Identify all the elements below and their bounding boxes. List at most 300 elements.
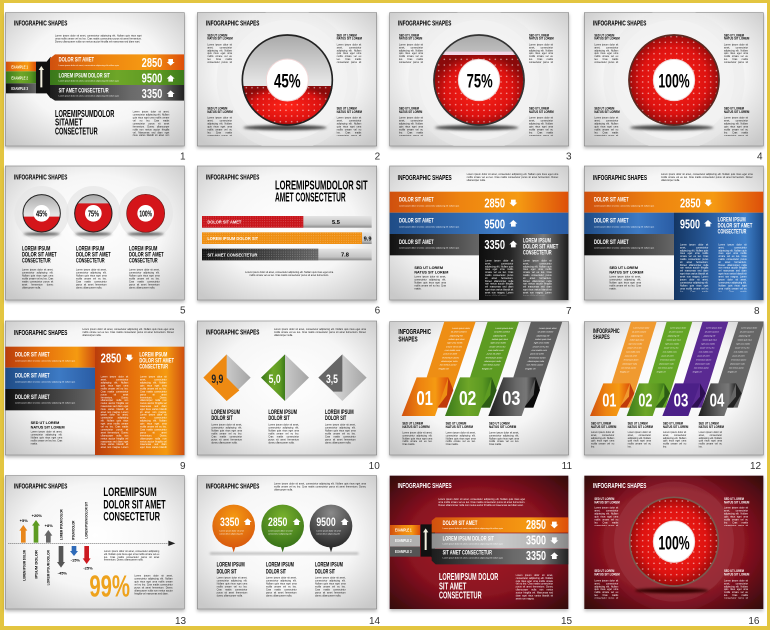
text: top left: NATUS SIT LOREM [594, 500, 620, 504]
slide 4: 100% gauge [584, 9, 763, 162]
band: orange [5, 347, 95, 368]
title: INFOGRAPHIC SHAPES [398, 173, 452, 182]
ribbon 02: ornare vel eu leo [489, 345, 507, 348]
ribbon 02: cras mattis cons [488, 349, 505, 352]
column 3 [315, 563, 346, 597]
bar: dark: 3350 [526, 549, 546, 563]
pin: green: Lorem ipsum dolor sit amet [268, 529, 293, 532]
ribbon 03: nullam quis risus [535, 338, 553, 341]
pin: green [261, 505, 304, 552]
diamond 9.9 [203, 354, 251, 401]
ribbon 01: ornare vel eu leo [445, 345, 463, 348]
slide 11: three ribbons [390, 322, 572, 472]
pin: orange: consectetur adipiscing elit [219, 532, 243, 535]
example tabs: EXAMPLE 2 [11, 75, 28, 80]
ribbon 01: non metus auctor [439, 364, 457, 367]
column 2 [628, 421, 653, 448]
band: dark [390, 234, 479, 255]
ribbon 02: nullam quis risus [491, 338, 509, 341]
band: orange: 2850 [680, 196, 701, 210]
diamond 3.5 [318, 354, 367, 401]
column 1: Lorem ipsum dolor sit amet, consectetur adipiscing elit. Nullam quis risus eget urna mollis ornare vel eu leo. Cras mattis consectetur purus sit amet fermentum donec ullamcorper nulla. [211, 424, 242, 444]
ribbon 02: sit amet consect [668, 330, 684, 333]
page number: 14 [369, 616, 381, 627]
arrow: red down: -25% [83, 565, 93, 570]
ribbon 03: nullam quis risus [702, 339, 717, 341]
text: top right: SED UT LOREM [529, 33, 549, 37]
column 3: Lorem ipsum dolor sit amet, consectetur adipiscing elit. Nullam quis risus eget urna mollis ornare vel eu leo. Cras mattis consectetur purus sit amet fermentum donec ullamcorper nulla. [129, 269, 160, 289]
ribbon 04: 04 [710, 390, 725, 411]
ribbon 02: adipiscing elit [492, 334, 507, 337]
text: bottom left: SED UT LOREM [207, 107, 228, 111]
ribbon 03: fringilla vel [692, 371, 702, 373]
title: INFOGRAPHIC [398, 329, 431, 336]
column 2: SED UT LOREM [628, 421, 648, 425]
title: INFOGRAPHIC SHAPES [14, 18, 67, 27]
column 3: NATUS SIT LOREM [489, 425, 517, 429]
bar: orange 9.9: 9.9 [364, 236, 372, 242]
ribbon 04: ornare vel eu leo [735, 347, 750, 349]
ribbon 03: ornare vel eu leo [532, 345, 550, 348]
page number: 5 [180, 305, 186, 316]
gauge 75%: 75% [88, 209, 99, 218]
band: dark: Lorem ipsum dolor sit amet, consectetur adipiscing elit nullam quis [399, 247, 459, 250]
vertical labels: LOREM IPSUM DOLOR [58, 509, 63, 540]
bar: dark: Lorem ipsum dolor sit amet, consectetur adipiscing elit nullam quis [443, 556, 503, 559]
column 2: LOREM IPSUM [266, 563, 294, 569]
column 1: Lorem ipsum dolor sit amet, consectetur adipiscing elit. Nullam quis risus eget urna mollis ornare vel eu leo. [591, 431, 614, 448]
shadow line [210, 553, 358, 554]
ribbon 03: adipiscing elit [536, 334, 550, 337]
page number: 10 [369, 461, 380, 472]
text: top right [337, 33, 362, 64]
band: blue: Lorem ipsum dolor sit amet, consectetur adipiscing elit nullam quis [15, 380, 75, 383]
band: dark: Lorem ipsum dolor sit amet, consectetur adipiscing elit nullam quis [15, 402, 75, 405]
band: orange: DOLOR SIT AMET [15, 352, 50, 359]
slide 16: dark red gauge [584, 471, 763, 627]
vertical labels: LOREM IPSUM DOLOR SIT [83, 502, 88, 539]
ribbon 04: non metus auctor [728, 366, 744, 369]
column 4: SED UT LOREM [699, 421, 719, 425]
title: SHAPES [593, 335, 610, 341]
ribbon 03: ullamcorper nulla [527, 360, 545, 363]
ribbon 02: non metus auctor [483, 364, 501, 367]
page number: 16 [748, 616, 760, 627]
ribbon 02: Lorem ipsum dolor [495, 327, 514, 330]
text: top left [594, 497, 620, 526]
pin: green: consectetur adipiscing elit [268, 532, 292, 535]
band: blue: DOLOR SIT AMET [594, 218, 629, 225]
ribbon 01: sit amet consect [450, 331, 467, 334]
ribbon 03: ullamcorper nulla [695, 363, 711, 365]
ribbon 01: fringilla vel [438, 367, 450, 370]
slide 6: horizontal bars [197, 166, 381, 316]
column 1: DOLOR SIT [211, 415, 233, 422]
heading: AMET CONSECTETUR [275, 191, 346, 205]
ribbon 03: sit amet consect [704, 330, 720, 333]
gauge 100% [118, 186, 173, 241]
column 1 [217, 563, 247, 597]
bar: dark: Lorem ipsum dolor sit amet, consectetur adipiscing elit nullam quis [59, 94, 119, 97]
gauge 100%: 100% [658, 533, 690, 554]
arrow: blue down [70, 546, 80, 562]
column 1 [22, 246, 57, 289]
ribbon 01: fringilla vel [620, 371, 630, 373]
column 2: LOREM IPSUM [268, 409, 297, 416]
text: bottom left [594, 107, 620, 136]
bar: orange: Lorem ipsum dolor sit amet, consectetur adipiscing elit nullam quis [59, 64, 119, 67]
column 2 [266, 563, 297, 597]
text: bottom left: NATUS SIT LOREM [207, 110, 233, 114]
text: top right: NATUS SIT LOREM [529, 37, 554, 41]
title: SHAPES [398, 337, 418, 344]
band: blue: Lorem ipsum dolor sit amet, consectetur adipiscing elit nullam quis [594, 225, 654, 228]
heading [55, 109, 114, 137]
column 2: Lorem ipsum dolor sit amet, consectetur adipiscing elit. Nullam quis risus eget urna mollis ornare vel eu leo. Cras mattis consectetur purus sit amet fermentum donec ullamcorper nulla. [266, 577, 297, 597]
text: bottom right: NATUS SIT LOREM [724, 110, 750, 114]
bar: orange: DOLOR SIT AMET [443, 520, 477, 527]
bar: red 5.5 [202, 216, 372, 228]
ribbon 01: eget urna mollis [628, 342, 643, 345]
icon: black arrow box [36, 57, 51, 98]
text: top left: NATUS SIT LOREM [399, 37, 423, 41]
band: dark: DOLOR SIT AMET [15, 394, 50, 401]
column 3: LOREM IPSUM [315, 563, 343, 569]
text: bottom left [207, 107, 233, 136]
ribbon 04 [698, 322, 763, 416]
text: top right [529, 33, 554, 64]
ribbon 03: purus sit amet [697, 354, 710, 357]
heading: CONSECTETUR [55, 126, 98, 137]
panel: dark detail: CONSECTETUR [523, 250, 552, 256]
ribbon 01 [590, 322, 657, 416]
column 1: CONSECTETUR [22, 258, 51, 265]
pin: dark: consectetur adipiscing elit [316, 532, 340, 535]
page number: 9 [180, 461, 186, 472]
text: bottom right: SED UT LOREM [724, 569, 744, 573]
text: bottom right: SED UT LOREM [724, 107, 744, 111]
ribbon 04: ullamcorper nulla [730, 363, 746, 365]
ribbon 01: purus sit amet [443, 353, 458, 356]
page number: 6 [375, 305, 381, 316]
arrow: orange up: +5% [20, 518, 28, 523]
gauge 75% [66, 186, 121, 241]
title: INFOGRAPHIC SHAPES [398, 18, 451, 27]
panel: blue detail [674, 213, 763, 300]
panel: dark detail: 3350 [484, 238, 505, 252]
page number: 15 [561, 616, 573, 627]
ribbon 02: fringilla vel [656, 371, 666, 373]
text: top right: SED UT LOREM [724, 497, 744, 501]
pin: dark: 9500 [316, 515, 336, 529]
pin: dark [310, 505, 352, 552]
panel: orange detail [95, 347, 184, 455]
bar: silver: LOREM IPSUM DOLOR SIT [443, 536, 494, 543]
band: blue: DOLOR SIT AMET [15, 373, 50, 380]
pin: green: 2850 [268, 515, 288, 529]
ribbon 04: adipiscing elit [738, 334, 751, 337]
column 1 [211, 409, 242, 444]
panel: orange detail: LOREM IPSUM [139, 353, 167, 359]
page number: 4 [757, 151, 763, 162]
heading: DOLOR SIT AMET [103, 497, 166, 511]
ribbon 01: fermentum donec [442, 356, 460, 359]
heading: LOREMIPSUM [103, 485, 157, 499]
bar: silver: 3500 [526, 534, 546, 548]
band: dark: DOLOR SIT AMET [594, 239, 629, 246]
text: top left: SED UT LOREM [594, 497, 615, 501]
column 3: LOREM IPSUM [325, 409, 354, 416]
slide 13: arrows chart [5, 476, 187, 627]
text: bottom right: NATUS SIT LOREM [337, 110, 362, 114]
text block: SED UT LOREM [31, 420, 60, 425]
title: INFOGRAPHIC SHAPES [206, 18, 259, 27]
vertical labels: IPSUM DOLOR [71, 521, 76, 540]
diamond 9.9: 9,9 [211, 372, 224, 386]
ribbon 03: cras mattis cons [531, 349, 548, 352]
ribbon 04: Lorem ipsum dolor [741, 327, 757, 329]
band: orange [584, 192, 763, 213]
ribbon 02 [445, 322, 519, 416]
title [593, 329, 620, 341]
ribbon 02: purus sit amet [661, 354, 674, 357]
ribbon 01: Lorem ipsum dolor [452, 327, 471, 330]
column 3: DOLOR SIT AMET [129, 252, 164, 259]
text: bottom left [399, 107, 423, 136]
arrow: grey up [44, 523, 53, 543]
axis arrow [8, 541, 175, 546]
text: top right: NATUS SIT LOREM [724, 500, 750, 504]
ribbon 02: non metus auctor [657, 366, 673, 369]
ribbon 01: cras mattis cons [626, 350, 640, 353]
column 1: LOREM IPSUM [211, 409, 240, 416]
bar: dark [432, 549, 568, 564]
panel: blue detail: DOLOR SIT AMET [718, 224, 753, 230]
slide 1: banner bars [5, 13, 186, 162]
panel: dark detail: DOLOR SIT AMET [523, 244, 559, 250]
panel: dark detail: LOREM IPSUM [523, 238, 551, 244]
column 2 [268, 409, 299, 444]
text: bottom right: SED UT LOREM [337, 107, 357, 111]
panel: dark detail [479, 234, 568, 300]
ribbon 01: cras mattis cons [444, 349, 462, 352]
bar: red 5.5: DOLOR SIT AMET [207, 220, 241, 226]
bar: dark [50, 85, 184, 101]
column 2: NATUS SIT LOREM [446, 425, 473, 429]
band: orange: Lorem ipsum dolor sit amet, consectetur adipiscing elit nullam quis [399, 204, 459, 207]
gauge 75%: 75% [467, 71, 493, 92]
ribbon 02: fermentum donec [485, 356, 504, 359]
gauge 100% [628, 34, 720, 130]
arrow: green up: +20% [32, 513, 42, 518]
arrow: grey up: +8% [45, 523, 53, 528]
column 3: Lorem ipsum dolor sit amet, consectetur adipiscing elit. Nullam quis risus eget urna mollis ornare vel eu leo. [663, 431, 686, 448]
page number: 7 [566, 306, 572, 317]
text: bottom right: NATUS SIT LOREM [529, 110, 554, 114]
title: INFOGRAPHIC SHAPES [593, 18, 646, 27]
bar: orange: Lorem ipsum dolor sit amet, consectetur adipiscing elit nullam quis [443, 527, 503, 530]
column 4: NATUS SIT LOREM [699, 425, 724, 429]
panel: blue detail: CONSECTETUR [718, 230, 747, 236]
bar: green [50, 70, 184, 86]
text: bottom right: NATUS SIT LOREM [724, 573, 750, 577]
text: bottom right [724, 569, 750, 599]
column 3: SED UT LOREM [489, 421, 510, 425]
text: bottom left: NATUS SIT LOREM [399, 110, 423, 114]
title [398, 329, 431, 344]
ribbon 03: fermentum donec [528, 356, 547, 359]
page number: 2 [375, 151, 381, 162]
ribbon 03: sit amet consect [537, 331, 554, 334]
page number: 13 [175, 616, 187, 627]
column 2: NATUS SIT LOREM [628, 425, 653, 429]
ribbon 03: 03 [674, 390, 688, 411]
ribbon 01: ullamcorper nulla [441, 360, 459, 363]
slide 2: 45% gauge [197, 9, 381, 162]
bar: orange 9.9 [202, 232, 372, 244]
ribbon 03: eget urna mollis [533, 342, 550, 345]
column 3: NATUS SIT LOREM [663, 425, 689, 429]
bar: silver: Lorem ipsum dolor sit amet, consectetur adipiscing elit nullam quis [443, 543, 503, 546]
column 2: Lorem ipsum dolor sit amet, consectetur adipiscing elit. Nullam quis risus eget urna mollis ornare vel eu leo. Cras mattis. [446, 431, 476, 446]
column 2: Lorem ipsum dolor sit amet, consectetur adipiscing elit. Nullam quis risus eget urna mollis ornare vel eu leo. Cras mattis consectetur purus sit amet fermentum donec ullamcorper nulla. [268, 424, 299, 444]
text: bottom left: SED UT LOREM [399, 107, 419, 111]
slide 15: dark red banner [390, 476, 573, 627]
panel: orange detail: 2850 [101, 351, 121, 365]
gauge 100%: 100% [139, 209, 152, 218]
title: INFOGRAPHIC SHAPES [398, 481, 452, 490]
text block: NATUS SIT LOREM [31, 425, 65, 430]
diamond 5.0 [261, 354, 309, 401]
arrow: blue down: -15% [71, 557, 80, 562]
diamond 5.0: 5,0 [269, 372, 281, 386]
heading: SITAMET [55, 118, 82, 129]
column 1: LOREM IPSUM [22, 246, 50, 253]
ribbon 04: eget urna mollis [736, 342, 750, 345]
bar: dark: 3350 [142, 87, 162, 101]
example tabs: EXAMPLE 1 [395, 528, 412, 533]
title: INFOGRAPHIC [593, 329, 620, 335]
ribbon 03: fermentum donec [696, 358, 712, 361]
title: INFOGRAPHIC SHAPES [14, 328, 67, 337]
gauge 45% [14, 186, 69, 241]
bar: green: 9500 [142, 72, 162, 86]
column 3: Lorem ipsum dolor sit amet, consectetur adipiscing elit. Nullam quis risus eget urna mollis ornare vel eu leo. Cras mattis consectetur purus sit amet fermentum donec ullamcorper nulla. [325, 424, 356, 444]
title: INFOGRAPHIC SHAPES [14, 481, 67, 490]
example tabs: EXAMPLE 3 [11, 86, 28, 91]
ribbon 03 [662, 322, 728, 416]
column 1: Lorem ipsum dolor sit amet, consectetur adipiscing elit. Nullam quis risus eget urna mollis ornare vel eu leo. Cras mattis. [402, 431, 432, 446]
band: orange: 2850 [484, 196, 505, 210]
example tabs: EXAMPLE 2 [395, 538, 412, 543]
band: dark [5, 389, 95, 410]
column 3 [663, 421, 689, 448]
bar: dark: SIT AMET CONSECTETUR [59, 87, 109, 94]
ribbon 01 [402, 322, 476, 416]
ribbon 03: non metus auctor [693, 366, 709, 369]
ribbon 03: adipiscing elit [703, 334, 716, 337]
title: INFOGRAPHIC SHAPES [206, 481, 259, 490]
ribbon 02: ullamcorper nulla [484, 360, 502, 363]
ribbon 03: cras mattis cons [698, 350, 713, 353]
column 2: LOREM IPSUM [76, 246, 104, 253]
text: bottom left [594, 569, 620, 599]
ribbon 01: non metus auctor [621, 366, 637, 369]
ribbon 02: 02 [638, 390, 652, 411]
arrow: orange up [19, 518, 28, 543]
arrow: red down [83, 546, 93, 570]
title: INFOGRAPHIC SHAPES [593, 173, 647, 182]
pin: orange: 3350 [220, 515, 240, 529]
vertical labels: IPSUM DOLOR [33, 550, 38, 579]
column 2: SED UT LOREM [446, 421, 467, 425]
column 3: SED UT LOREM [663, 421, 683, 425]
band: blue [5, 368, 95, 389]
column 3: Lorem ipsum dolor sit amet, consectetur adipiscing elit. Nullam quis risus eget urna mollis ornare vel eu leo. Cras mattis consectetur purus sit amet fermentum donec ullamcorper nulla. [315, 577, 346, 597]
column 4 [699, 421, 724, 448]
ribbon 01: adipiscing elit [631, 334, 643, 337]
gauge 45%: 45% [36, 209, 47, 218]
band: blue [390, 213, 568, 234]
text: bottom left: SED UT LOREM [594, 107, 615, 111]
panel: orange detail: DOLOR SIT AMET [139, 359, 174, 365]
ribbon 02: Lorem ipsum dolor [670, 327, 686, 329]
arrow: dark down: -45% [58, 571, 67, 576]
slide 12: four ribbons [584, 322, 763, 472]
vertical labels: LOREM IPSUM DOLOR [21, 550, 26, 581]
text block: Lorem ipsum dolor sit amet, consectetur adipiscing elit. Nullam quis risus eget urna mollis ornare vel eu leo. Cras mattis consectetur purus sit amet fermentum. Donec ullamcorper nulla non metus auctor fringilla vel maecenas sed diam. [134, 575, 173, 595]
text: top left: NATUS SIT LOREM [207, 37, 233, 41]
text: top left: SED UT LOREM [207, 33, 228, 37]
ribbon 03: non metus auctor [526, 364, 544, 367]
heading: CONSECTETUR [103, 510, 160, 524]
band: orange [390, 192, 568, 213]
ribbon 01: adipiscing elit [449, 334, 463, 337]
text: bottom right [529, 107, 554, 136]
text: top right [724, 33, 750, 64]
ribbon 03: purus sit amet [530, 353, 545, 356]
text: bottom right: SED UT LOREM [529, 107, 549, 111]
bar: green: LOREM IPSUM DOLOR SIT [59, 72, 110, 79]
column 3 [325, 409, 356, 444]
ribbon 03: Lorem ipsum dolor [538, 327, 557, 330]
page number: 11 [562, 461, 572, 472]
column 2 [446, 421, 476, 447]
band: dark [584, 234, 674, 255]
ribbon 04: fringilla vel [727, 371, 737, 373]
bar: orange [432, 517, 568, 533]
title: INFOGRAPHIC SHAPES [593, 481, 646, 490]
big number: 99% [89, 570, 130, 604]
bar: orange 9.9: LOREM IPSUM DOLOR SIT [207, 236, 258, 242]
page number: 8 [754, 306, 760, 317]
column 1: DOLOR SIT AMET [22, 252, 57, 259]
page number: 3 [566, 151, 572, 162]
ribbon 02: 02 [459, 387, 476, 410]
bar: dark: SIT AMET CONSECTETUR [443, 549, 492, 556]
ribbon 02: eget urna mollis [665, 342, 679, 345]
band: orange: DOLOR SIT AMET [399, 197, 434, 204]
ribbon 02: ornare vel eu leo [664, 347, 679, 349]
vertical labels [21, 502, 88, 585]
band: blue: Lorem ipsum dolor sit amet, consectetur adipiscing elit nullam quis [399, 225, 459, 228]
vertical labels: LOREM IPSUM DOLOR [46, 550, 51, 585]
text: top right [724, 497, 750, 526]
column 1: SED UT LOREM [591, 421, 611, 425]
gauge 75% [433, 34, 525, 130]
text: bottom left: NATUS SIT LOREM [594, 110, 620, 114]
column 4: Lorem ipsum dolor sit amet, consectetur adipiscing elit. Nullam quis risus eget urna mollis ornare vel eu leo. [699, 431, 722, 448]
